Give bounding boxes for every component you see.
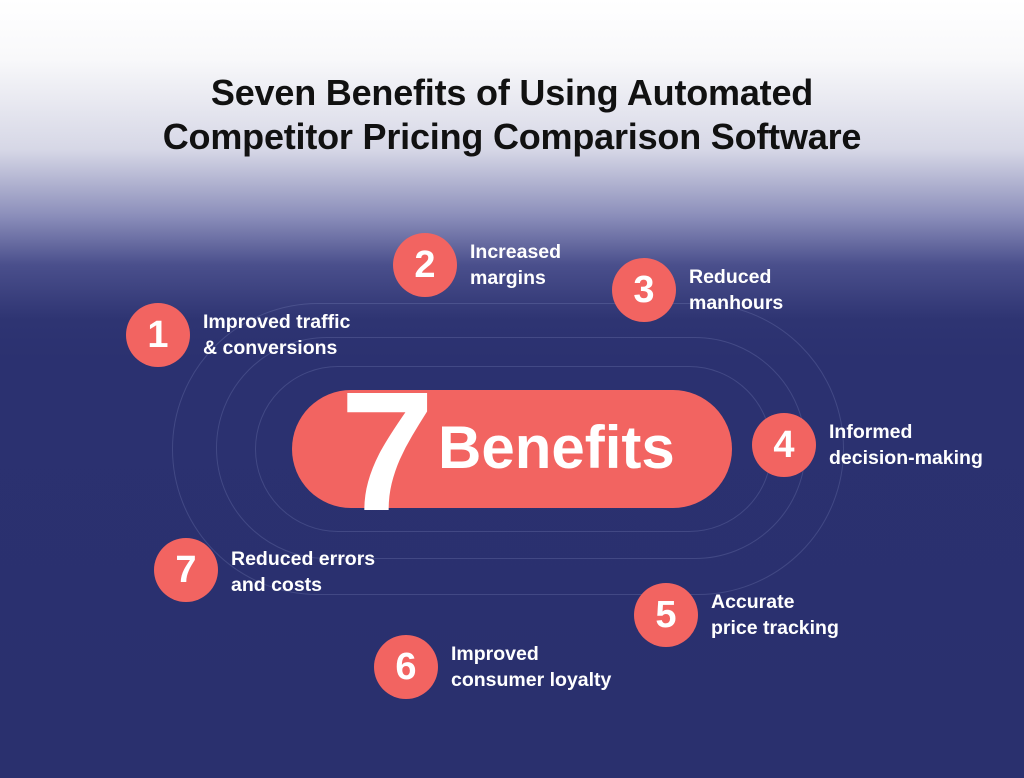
benefit 1: 1 <box>147 314 169 356</box>
benefit 2: margins <box>470 267 546 289</box>
benefit 2: Increased <box>470 241 561 263</box>
benefit 6: Improved <box>451 643 539 665</box>
benefit 2 <box>393 233 561 297</box>
benefit 6: consumer loyalty <box>451 669 611 691</box>
benefit 2: 2 <box>414 244 436 286</box>
benefit 3 <box>612 258 783 322</box>
benefit 4: decision-making <box>829 447 983 469</box>
benefit 6 <box>374 635 612 699</box>
benefit 6: 6 <box>395 646 417 688</box>
title: Competitor Pricing Comparison Software <box>163 116 861 157</box>
benefit 4 <box>752 413 983 477</box>
benefit 7: Reduced errors <box>231 548 375 570</box>
benefit 3: 3 <box>633 269 655 311</box>
benefit 1 <box>126 303 350 367</box>
benefit 5: 5 <box>655 594 677 636</box>
benefit 5 <box>634 583 839 647</box>
benefit 1: & conversions <box>203 337 337 359</box>
benefit 5: price tracking <box>711 617 839 639</box>
title: Seven Benefits of Using Automated <box>211 72 813 113</box>
benefit 4: Informed <box>829 421 912 443</box>
center pill: 7 Benefits <box>292 390 732 508</box>
benefit 5: Accurate <box>711 591 794 613</box>
title <box>163 72 861 157</box>
benefit 4: 4 <box>773 424 795 466</box>
big number 7: 7 <box>340 357 435 547</box>
benefit 7 <box>154 538 375 602</box>
benefit 3: manhours <box>689 292 783 314</box>
decorative rings <box>172 303 844 595</box>
Benefits label: Benefits <box>438 414 675 481</box>
benefit 7: 7 <box>175 549 197 591</box>
benefit 3: Reduced <box>689 266 771 288</box>
benefit 7: and costs <box>231 574 322 596</box>
benefit 1: Improved traffic <box>203 311 350 333</box>
